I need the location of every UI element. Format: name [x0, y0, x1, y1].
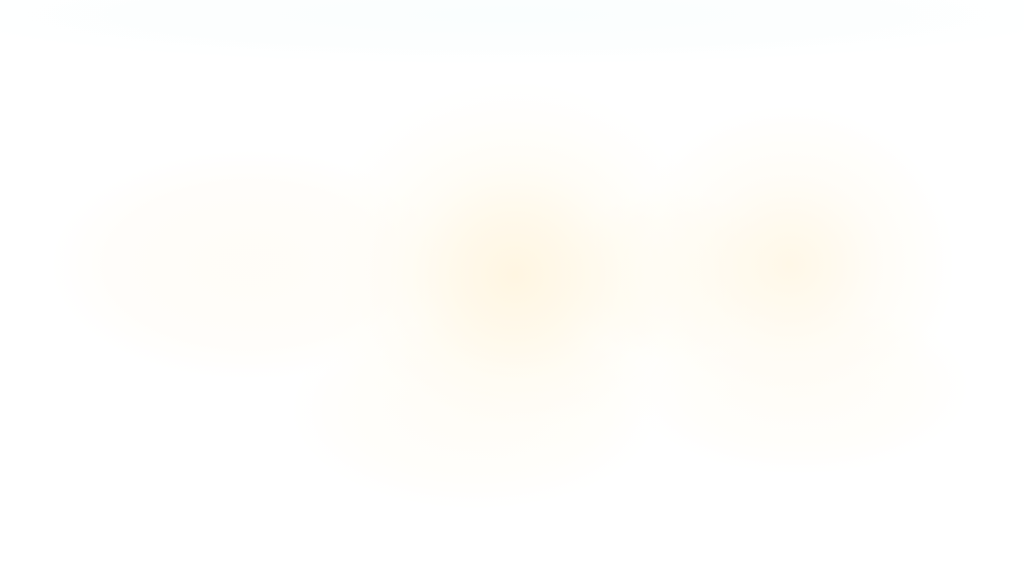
right glow: secondary warm spot — [625, 105, 955, 425]
lower glow: faint wash beneath centre — [290, 310, 660, 510]
lower right glow: faint wash — [630, 300, 970, 475]
bridge glow: wash joining centre and right spots — [560, 190, 780, 360]
left glow: faint elongated wash — [50, 150, 450, 380]
central glow: main warm spot — [315, 80, 715, 470]
top band: faint cyan tint — [0, 0, 1024, 65]
